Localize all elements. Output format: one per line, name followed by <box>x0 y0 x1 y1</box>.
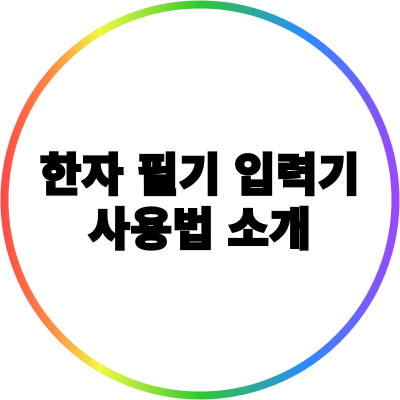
title <box>40 150 360 255</box>
title line 1: 한자 필기 입력기 <box>40 150 360 200</box>
title line 2: 사용법 소개 <box>88 204 312 255</box>
